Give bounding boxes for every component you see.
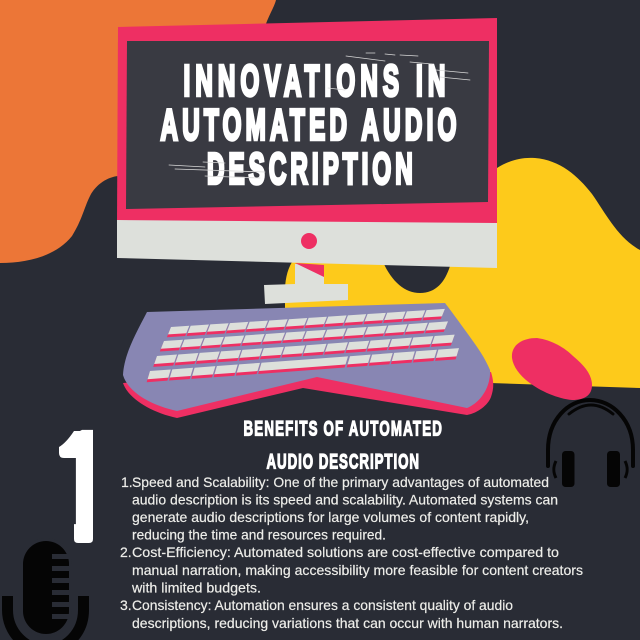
keys row 2 (161, 325, 446, 348)
item 3: consistency (120, 597, 563, 631)
section heading (244, 416, 442, 473)
item 3: consistency: Consistency: Automation ensures a consistent quality of audio (132, 597, 513, 613)
microphone icon (8, 538, 84, 640)
title: DESCRIPTION (207, 144, 413, 193)
item 1: speed and scalability: reducing the time and resources required. (132, 526, 386, 542)
section heading: AUDIO DESCRIPTION (266, 449, 419, 473)
keyboard pink base (123, 370, 493, 418)
microphone body (20, 538, 72, 637)
keyboard body (123, 303, 490, 411)
keys row 1 (168, 313, 444, 334)
yellow blob (285, 158, 640, 388)
item 1: speed and scalability: 1. (121, 474, 133, 490)
monitor screen (126, 41, 489, 209)
item 1: speed and scalability: generate audio descriptions for large volumes of content rapidly, (132, 509, 529, 525)
monitor chin (117, 220, 497, 268)
keys row 3 (155, 339, 454, 363)
item 1: speed and scalability (121, 474, 558, 542)
microphone holder (8, 596, 84, 640)
item 3: consistency: descriptions, reducing variations that can occur with human narrators. (132, 615, 563, 631)
title: INNOVATIONS IN (184, 56, 445, 105)
item 1: speed and scalability: audio description is its speed and scalability. Automated systems can (132, 492, 558, 508)
title: AUTOMATED AUDIO (160, 100, 456, 149)
item 1: speed and scalability: Speed and Scalability: One of the primary advantages of automated (132, 474, 549, 490)
benefits list (120, 474, 583, 631)
mouse (512, 338, 592, 400)
item 2: cost-efficiency: 2. (120, 544, 132, 560)
monitor stand (264, 263, 348, 304)
item 2: cost-efficiency: with limited budgets. (131, 580, 261, 596)
monitor pink frame (117, 18, 497, 224)
large numeral 1: 1 (36, 362, 133, 589)
monitor power button (301, 233, 317, 249)
item 2: cost-efficiency: manual narration, making accessibility more feasible for content creators (132, 562, 583, 578)
title (160, 56, 456, 193)
microphone grille (52, 554, 70, 619)
monitor (117, 18, 497, 304)
orange blob (0, 0, 276, 263)
title glitch scratches (169, 53, 470, 178)
item 2: cost-efficiency (120, 544, 583, 596)
section heading: BENEFITS OF AUTOMATED (244, 416, 442, 440)
item 2: cost-efficiency: Cost-Efficiency: Automated solutions are cost-effective compared to (132, 544, 559, 560)
item 3: consistency: 3. (120, 597, 132, 613)
large numeral 1 (59, 430, 93, 543)
keys row 4 with spacebar (148, 352, 459, 378)
keyboard (123, 303, 493, 418)
headphones icon (548, 400, 633, 487)
